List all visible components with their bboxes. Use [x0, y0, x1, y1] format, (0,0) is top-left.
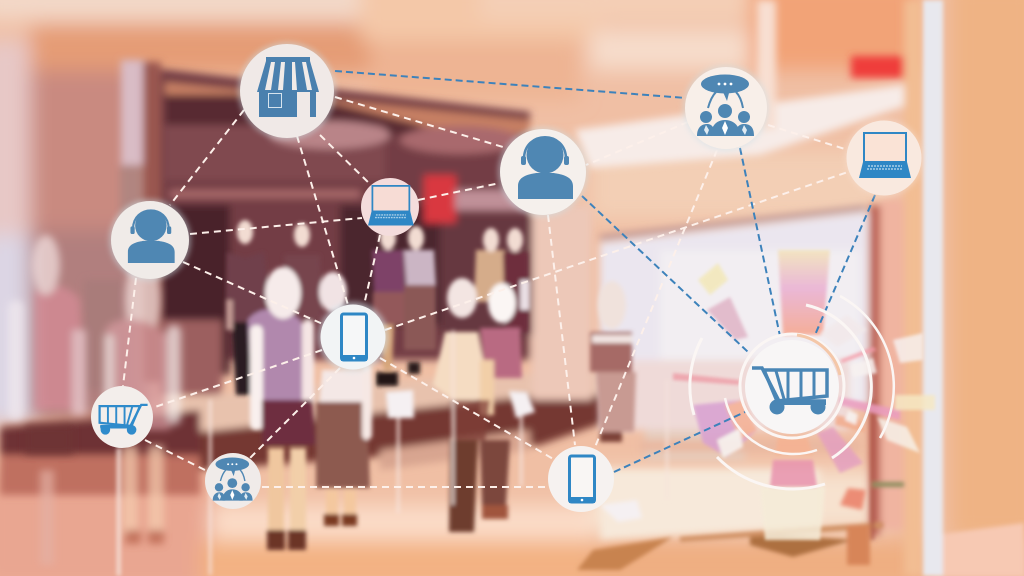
node: group chat lower	[205, 453, 261, 509]
node: shop	[238, 42, 336, 140]
node: laptop right	[845, 119, 923, 197]
signs	[386, 390, 642, 522]
node: tablet center	[318, 302, 388, 372]
ghost shoppers on the left	[8, 235, 181, 565]
node: tablet lower	[548, 446, 614, 512]
connection lines: white dashed	[123, 97, 848, 487]
back row	[226, 252, 270, 325]
target rings around the big cart	[690, 296, 894, 489]
shop window and platform	[0, 60, 640, 495]
front figures	[248, 309, 310, 400]
mall ceiling, glass and right columns	[575, 0, 923, 576]
node: cart left	[91, 386, 153, 448]
node: agent left	[109, 199, 191, 281]
node: laptop middle	[361, 178, 419, 236]
node: group chat top	[683, 65, 769, 151]
mannequins in the window and front shoppers	[117, 220, 668, 576]
node: agent center	[498, 127, 588, 217]
connection lines: blue dashed	[335, 71, 875, 472]
radial burst behind the big cart	[673, 250, 935, 540]
node: big cart	[745, 340, 839, 434]
